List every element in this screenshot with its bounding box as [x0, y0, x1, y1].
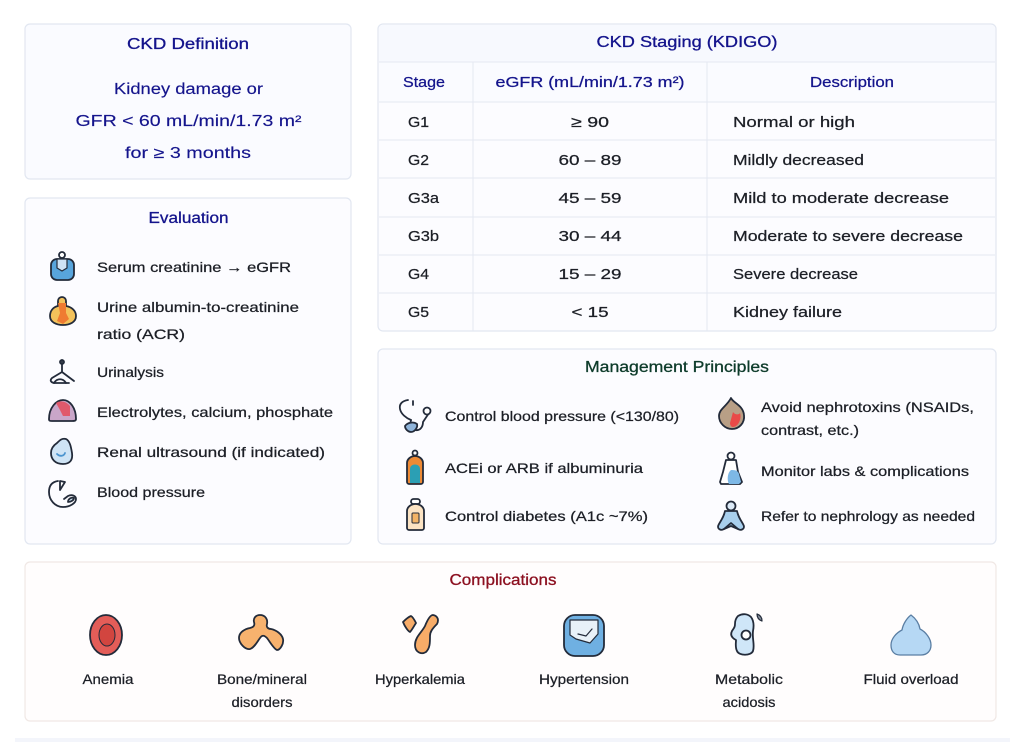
icon: urinalysis — [51, 360, 74, 383]
heading: CKD Definition: CKD Definition — [127, 36, 249, 53]
text: urine ACR — [97, 299, 299, 342]
text: refer to nephrology: Refer to nephrology as needed — [761, 508, 975, 524]
heading: CKD Staging: CKD Staging (KDIGO) — [596, 34, 778, 51]
definition text: GFR < 60 mL/min/1.73 m² — [76, 113, 302, 130]
complication: bone/mineral disorders: Bone/mineral — [217, 671, 307, 687]
icon: renal ultrasound — [51, 439, 72, 464]
complication: metabolic acidosis: Metabolic — [715, 671, 783, 687]
definition text — [76, 81, 302, 162]
row: G3b: 30 – 44 — [558, 228, 622, 245]
row: G2: 60 – 89 — [558, 152, 622, 169]
icon: potassium — [403, 615, 438, 653]
text: avoid nephrotoxins: contrast, etc.) — [761, 422, 859, 438]
text: electrolytes: Electrolytes, calcium, phosphate — [97, 404, 333, 420]
icon: nephrotoxin — [719, 398, 744, 429]
panel: Complications — [25, 562, 996, 721]
text: urine ACR: Urine albumin-to-creatinine — [97, 299, 299, 315]
icon: monitor labs — [720, 452, 742, 484]
panel: Management Principles — [378, 349, 996, 544]
row: G2: G2 — [408, 152, 429, 169]
text: monitor labs: Monitor labs & complications — [761, 463, 969, 479]
complication: anemia: Anemia — [82, 671, 134, 687]
complication: anemia — [82, 615, 134, 687]
row: G1: G1 — [408, 114, 429, 131]
text: avoid nephrotoxins — [761, 399, 974, 438]
table header: Stage — [403, 74, 445, 91]
icon: electrolytes — [49, 400, 76, 421]
row: G3a: G3a — [408, 190, 440, 207]
heading: Management Principles: Management Principles — [585, 359, 769, 376]
complication: hypertension: Hypertension — [539, 671, 629, 687]
icon: flask — [731, 614, 762, 655]
row: G4: G4 — [408, 266, 429, 283]
row: G3a — [408, 190, 949, 207]
icon: diabetes bottle — [407, 499, 424, 530]
table header — [403, 74, 894, 91]
row: G4: Severe decrease — [733, 266, 858, 283]
row: G5: G5 — [408, 304, 429, 321]
complication: hyperkalemia: Hyperkalemia — [375, 671, 465, 687]
row: G1: ≥ 90 — [571, 114, 609, 131]
icon: blood pressure — [49, 481, 76, 507]
complication: fluid overload: Fluid overload — [864, 671, 958, 687]
panel: Evaluation — [25, 198, 351, 544]
row: G3b: G3b — [408, 228, 439, 245]
text: urine ACR: ratio (ACR) — [97, 326, 185, 342]
heading: Evaluation: Evaluation — [148, 210, 228, 227]
icon: red blood cell — [90, 615, 122, 655]
row: G2: Mildly decreased — [733, 152, 864, 169]
text: serum creatinine: Serum creatinine → eGFR — [97, 259, 291, 275]
row: G5 — [408, 304, 842, 321]
text: blood pressure: Blood pressure — [97, 484, 205, 500]
text: control diabetes: Control diabetes (A1c ~7%) — [445, 508, 648, 524]
icon: bone — [239, 615, 283, 650]
complication: hypertension — [539, 615, 629, 687]
complication: fluid overload — [864, 615, 958, 687]
row: G3a: Mild to moderate decrease — [733, 190, 949, 207]
row: G1: Normal or high — [733, 114, 855, 131]
icon: fluid drop — [891, 615, 931, 655]
row: G3b: Moderate to severe decrease — [733, 228, 963, 245]
text: ACEi or ARB: ACEi or ARB if albuminuria — [445, 460, 643, 476]
text: avoid nephrotoxins: Avoid nephrotoxins (NSAIDs, — [761, 399, 974, 415]
definition text: for ≥ 3 months — [125, 145, 251, 162]
row: G3b — [408, 228, 963, 245]
complication: metabolic acidosis: acidosis — [722, 694, 776, 710]
row: G4: 15 – 29 — [558, 266, 622, 283]
icon: ACE bottle — [407, 450, 423, 484]
complication: hyperkalemia — [375, 615, 465, 687]
row: G3a: 45 – 59 — [558, 190, 622, 207]
text: renal ultrasound: Renal ultrasound (if indicated) — [97, 444, 325, 460]
row: G1 — [408, 114, 855, 131]
heading: Complications: Complications — [450, 572, 557, 589]
table header: eGFR (mL/min/1.73 m²) — [496, 74, 685, 91]
icon: blood pressure device — [564, 615, 604, 656]
row: G2 — [408, 152, 864, 169]
panel: CKD staging table — [378, 24, 996, 331]
table header: Description — [810, 74, 894, 91]
row: G5: < 15 — [572, 304, 608, 321]
complication: bone/mineral disorders — [217, 615, 307, 710]
icon: urine sample — [50, 297, 76, 325]
icon: stethoscope — [400, 400, 430, 432]
text: control blood pressure: Control blood pressure (<130/80) — [445, 408, 679, 424]
definition text: Kidney damage or — [114, 81, 263, 98]
complication: metabolic acidosis — [715, 614, 783, 710]
icon: refer to nephrology — [718, 502, 744, 530]
row: G4 — [408, 266, 858, 283]
complication: bone/mineral disorders: disorders — [232, 694, 292, 710]
text: urinalysis: Urinalysis — [97, 364, 164, 380]
row: G5: Kidney failure — [733, 304, 842, 321]
icon: serum bottle — [51, 252, 74, 280]
panel: CKD definition — [25, 24, 351, 179]
